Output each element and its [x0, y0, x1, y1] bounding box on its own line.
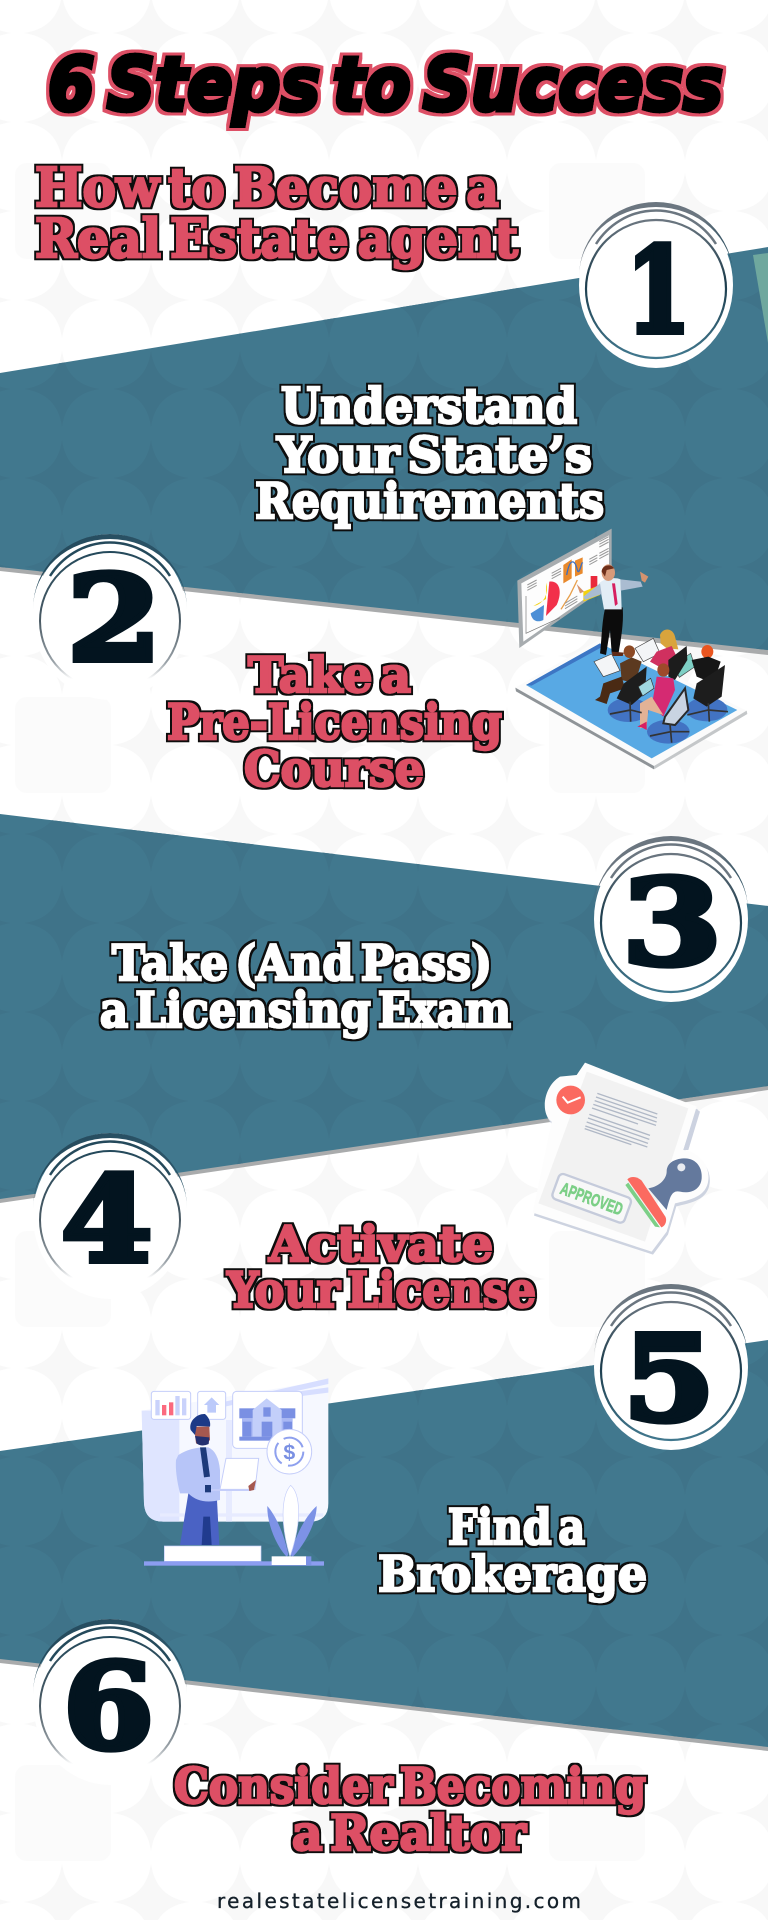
check badge: [556, 1086, 585, 1114]
document sheet: [533, 1063, 710, 1255]
step 1 heading: [255, 377, 604, 530]
step 6 badge: 6: [63, 1637, 154, 1776]
coin: [267, 1429, 312, 1474]
step 6 heading: a Realtor: [292, 1804, 527, 1862]
subtitle: Real Estate agent: [35, 208, 518, 270]
illustration: agent with laptop and house cards: [142, 1378, 328, 1566]
step 3 heading: a Licensing Exam: [100, 981, 511, 1039]
footer website address: realestatelicensetraining.com: [217, 1889, 581, 1913]
step 2 heading: Take a: [248, 646, 411, 704]
illustration: presentation to team on tablet: [515, 529, 747, 769]
chart card: [151, 1391, 191, 1419]
house card: [233, 1391, 302, 1448]
step 2 heading: [167, 646, 502, 798]
step 2 heading: Pre-Licensing: [167, 693, 502, 751]
step 2 heading: Course: [244, 740, 424, 798]
presentation board: [517, 529, 612, 648]
step 2 badge: [33, 534, 187, 700]
step 6 heading: Consider Becoming: [174, 1757, 646, 1815]
tablet platform: [515, 639, 747, 769]
panel: teal band 2: [0, 814, 768, 1203]
step 5 heading: [378, 1498, 647, 1603]
potted plant: [267, 1485, 317, 1565]
step 3 heading: [100, 934, 511, 1039]
approved stamp mark: APPROVED: [558, 1178, 626, 1219]
presenter: [577, 564, 648, 656]
step 4 badge: 4: [61, 1150, 152, 1289]
illustration: approved document and stamp: [533, 1063, 710, 1255]
step 1 heading: Your State’s: [276, 426, 592, 484]
step 5 badge: [594, 1284, 748, 1450]
step 6 heading: [174, 1757, 646, 1862]
backdrop window: [142, 1378, 328, 1522]
subtitle: [35, 157, 518, 270]
agent figure: [176, 1414, 259, 1545]
step 2 badge: 2: [67, 549, 162, 688]
small house card: [198, 1391, 226, 1419]
rubber stamp: [625, 1158, 702, 1227]
step 5 badge: 5: [623, 1309, 715, 1448]
step 5 heading: Brokerage: [378, 1545, 647, 1603]
step 5 heading: Find a: [448, 1498, 585, 1556]
step 4 badge: [33, 1133, 187, 1299]
subtitle: How to Become a: [35, 157, 499, 219]
step 3 badge: [594, 836, 748, 1002]
plinth and floor: [144, 1546, 324, 1566]
step 1 badge: 1: [626, 221, 691, 360]
step 4 heading: Activate: [268, 1215, 493, 1273]
step 6 badge: [33, 1619, 187, 1785]
step 1 heading: Understand: [281, 377, 577, 435]
coin: $: [283, 1440, 295, 1464]
approved stamp mark: [551, 1173, 632, 1224]
seated team: [594, 630, 728, 743]
text lines: [585, 1093, 657, 1147]
accent: green sliver: [753, 253, 768, 343]
step 1 heading: Requirements: [255, 472, 604, 530]
step 3 heading: Take (And Pass): [112, 934, 492, 992]
step 4 heading: [226, 1215, 536, 1319]
step 3 badge: 3: [622, 853, 722, 992]
panel: teal band 3: [0, 1340, 768, 1751]
step 1 badge: [579, 202, 733, 368]
step 4 heading: Your License: [226, 1261, 536, 1319]
panel: teal band 1: [0, 247, 768, 655]
